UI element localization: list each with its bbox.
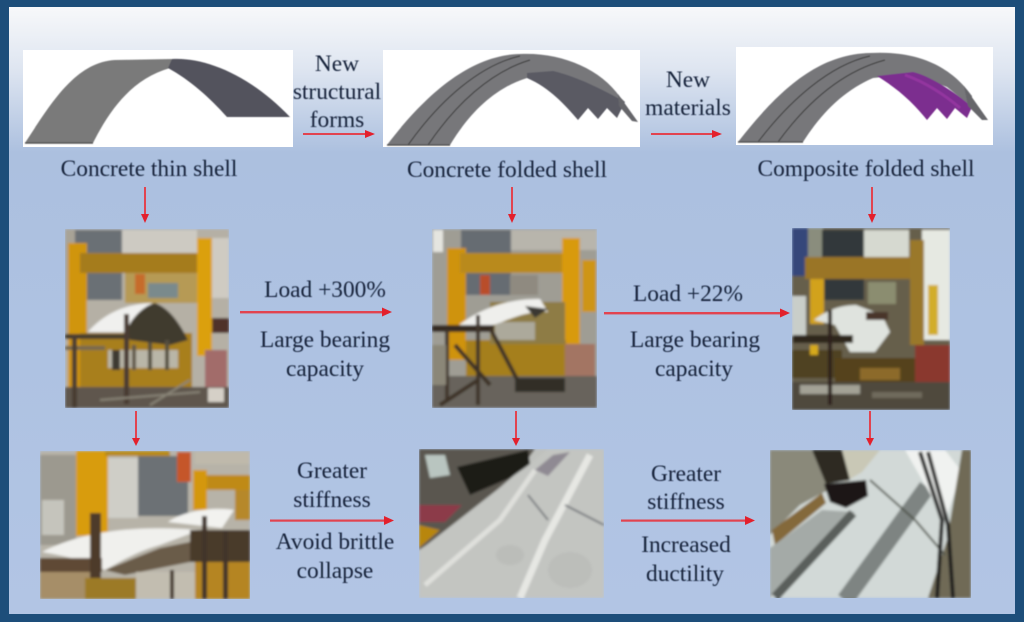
arrow: side view to crack detail (270, 516, 394, 525)
label: new structural forms: New (315, 51, 359, 77)
text: load +300%: Large bearing (260, 327, 390, 353)
diagram: concrete thin shell (23, 50, 293, 147)
arrow: test 2 to test 3 (604, 308, 790, 318)
text: stiffness and ductility: Greater (651, 461, 721, 487)
text: stiffness and brittle collapse: stiffness (293, 487, 371, 513)
label: new structural forms: structural (293, 79, 382, 105)
label: new materials (645, 67, 731, 121)
text: load +22%: Large bearing (630, 327, 760, 353)
text: stiffness and ductility: Increased (641, 532, 731, 558)
arrow: shell 1 down (141, 187, 149, 223)
arrow: test 2 down (512, 411, 520, 446)
text: load +22% (630, 281, 760, 382)
label: new structural forms (293, 51, 382, 133)
diagram: composite folded shell (736, 47, 993, 145)
text: stiffness and ductility: ductility (646, 561, 724, 587)
text: stiffness and brittle collapse: collapse (297, 558, 373, 584)
heading: composite folded shell: Composite folded shell (758, 156, 975, 182)
text: stiffness and brittle collapse: Avoid brittle (276, 529, 394, 555)
label: new materials: materials (645, 95, 731, 121)
arrow: shell 2 down (508, 187, 516, 223)
text: load +22%: capacity (655, 356, 733, 382)
photo: thin shell test rig (65, 229, 229, 408)
photo: composite shell test rig (792, 228, 950, 410)
heading: concrete thin shell: Concrete thin shell (61, 156, 238, 182)
label: new structural forms: forms (310, 107, 364, 133)
arrow: test 3 down (866, 411, 874, 446)
arrow: test 1 to test 2 (240, 308, 392, 316)
text: stiffness and brittle collapse: Greater (297, 458, 367, 484)
text: stiffness and ductility (641, 461, 731, 587)
text: load +300%: Load +300% (264, 277, 386, 303)
text: load +300%: capacity (286, 356, 364, 382)
arrow: crack detail to composite detail (621, 516, 755, 525)
text: load +22%: Load +22% (633, 281, 743, 307)
text: stiffness and brittle collapse (276, 458, 394, 584)
text: load +300% (260, 277, 390, 382)
photo: folded shell test rig (432, 229, 597, 408)
label: new materials: New (666, 67, 710, 93)
diagram: concrete folded shell (383, 50, 640, 147)
photo: folded shell crack detail (419, 449, 604, 598)
text: stiffness and ductility: stiffness (647, 489, 725, 515)
photo: composite shell detail (770, 450, 971, 600)
arrow: shell 3 down (868, 187, 876, 223)
heading: concrete folded shell: Concrete folded shell (407, 157, 608, 183)
arrow: concrete to composite (651, 130, 722, 138)
photo: thin shell side view (40, 451, 250, 599)
arrow: thin to folded (303, 130, 375, 138)
arrow: test 1 down (132, 411, 140, 446)
